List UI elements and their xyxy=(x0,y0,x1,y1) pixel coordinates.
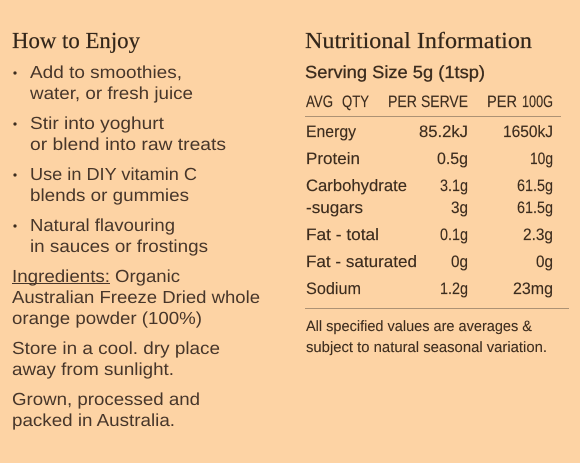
storage text xyxy=(12,338,220,379)
nutrition table rows: 61.5g xyxy=(517,177,553,195)
bullet list: blends or gummies xyxy=(30,185,189,205)
bullet list: Natural flavouring xyxy=(30,215,175,235)
bullet list: Use in DIY vitamin C xyxy=(30,164,197,184)
table header xyxy=(306,93,553,111)
table header: QTY xyxy=(342,93,369,111)
nutrition table rows: -sugars xyxy=(306,199,363,217)
bullet list: in sauces or frostings xyxy=(30,236,208,256)
bullet list: or blend into raw treats xyxy=(30,134,226,154)
bullet list: water, or fresh juice xyxy=(29,83,193,103)
table header: AVG xyxy=(306,93,333,111)
panel: how to enjoy xyxy=(12,28,260,430)
ingredients text: Australian Freeze Dried whole xyxy=(12,287,260,307)
nutrition table rows: Fat - saturated xyxy=(306,253,417,271)
table header: 100G xyxy=(522,93,553,111)
nutrition table rows: 1650kJ xyxy=(503,123,553,141)
table header: PER xyxy=(388,93,417,111)
nutrition table rows: 3g xyxy=(451,199,468,217)
nutrition table rows: Energy xyxy=(306,123,357,141)
nutrition table rows: Carbohydrate xyxy=(306,177,407,195)
table header: SERVE xyxy=(421,93,468,111)
footnote: subject to natural seasonal variation. xyxy=(306,339,547,356)
nutrition table rows: 10g xyxy=(530,150,553,168)
serving size: Serving Size 5g (1tsp) xyxy=(305,62,485,82)
panel: nutritional information xyxy=(305,28,569,356)
nutrition table rows: Sodium xyxy=(306,280,361,298)
origin text: packed in Australia. xyxy=(12,410,175,430)
bullet list: Stir into yoghurt xyxy=(30,113,164,133)
origin text: Grown, processed and xyxy=(12,389,200,409)
table header: PER xyxy=(487,93,517,111)
nutrition table rows: Fat - total xyxy=(306,226,379,244)
nutrition table rows xyxy=(306,123,553,298)
ingredients text xyxy=(12,266,260,328)
nutrition table rows: 1.2g xyxy=(440,280,468,298)
ingredients text: Ingredients: xyxy=(12,266,110,286)
storage text: Store in a cool. dry place xyxy=(12,338,220,358)
footnote xyxy=(306,318,547,356)
storage text: away from sunlight. xyxy=(12,359,174,379)
heading: how to enjoy: How to Enjoy xyxy=(12,28,140,53)
bullet list: Add to smoothies, xyxy=(30,62,182,82)
heading: nutritional information: Nutritional Information xyxy=(305,28,533,53)
nutrition table rows: Protein xyxy=(306,150,360,168)
footnote: All specified values are averages & xyxy=(306,318,532,335)
bullet list xyxy=(13,62,226,256)
nutrition table rows: 0g xyxy=(536,253,553,271)
ingredients text: Organic xyxy=(115,266,180,286)
nutrition table rows: 2.3g xyxy=(523,226,553,244)
nutrition table rows: 0g xyxy=(451,253,468,271)
nutrition table rows: 0.5g xyxy=(437,150,468,168)
nutrition table rows: 3.1g xyxy=(440,177,468,195)
nutrition table rows: 85.2kJ xyxy=(419,123,468,141)
origin text xyxy=(12,389,200,430)
nutrition table rows: 61.5g xyxy=(517,199,553,217)
nutrition table rows: 0.1g xyxy=(440,226,468,244)
ingredients text: orange powder (100%) xyxy=(12,308,202,328)
nutrition table rows: 23mg xyxy=(513,280,553,298)
